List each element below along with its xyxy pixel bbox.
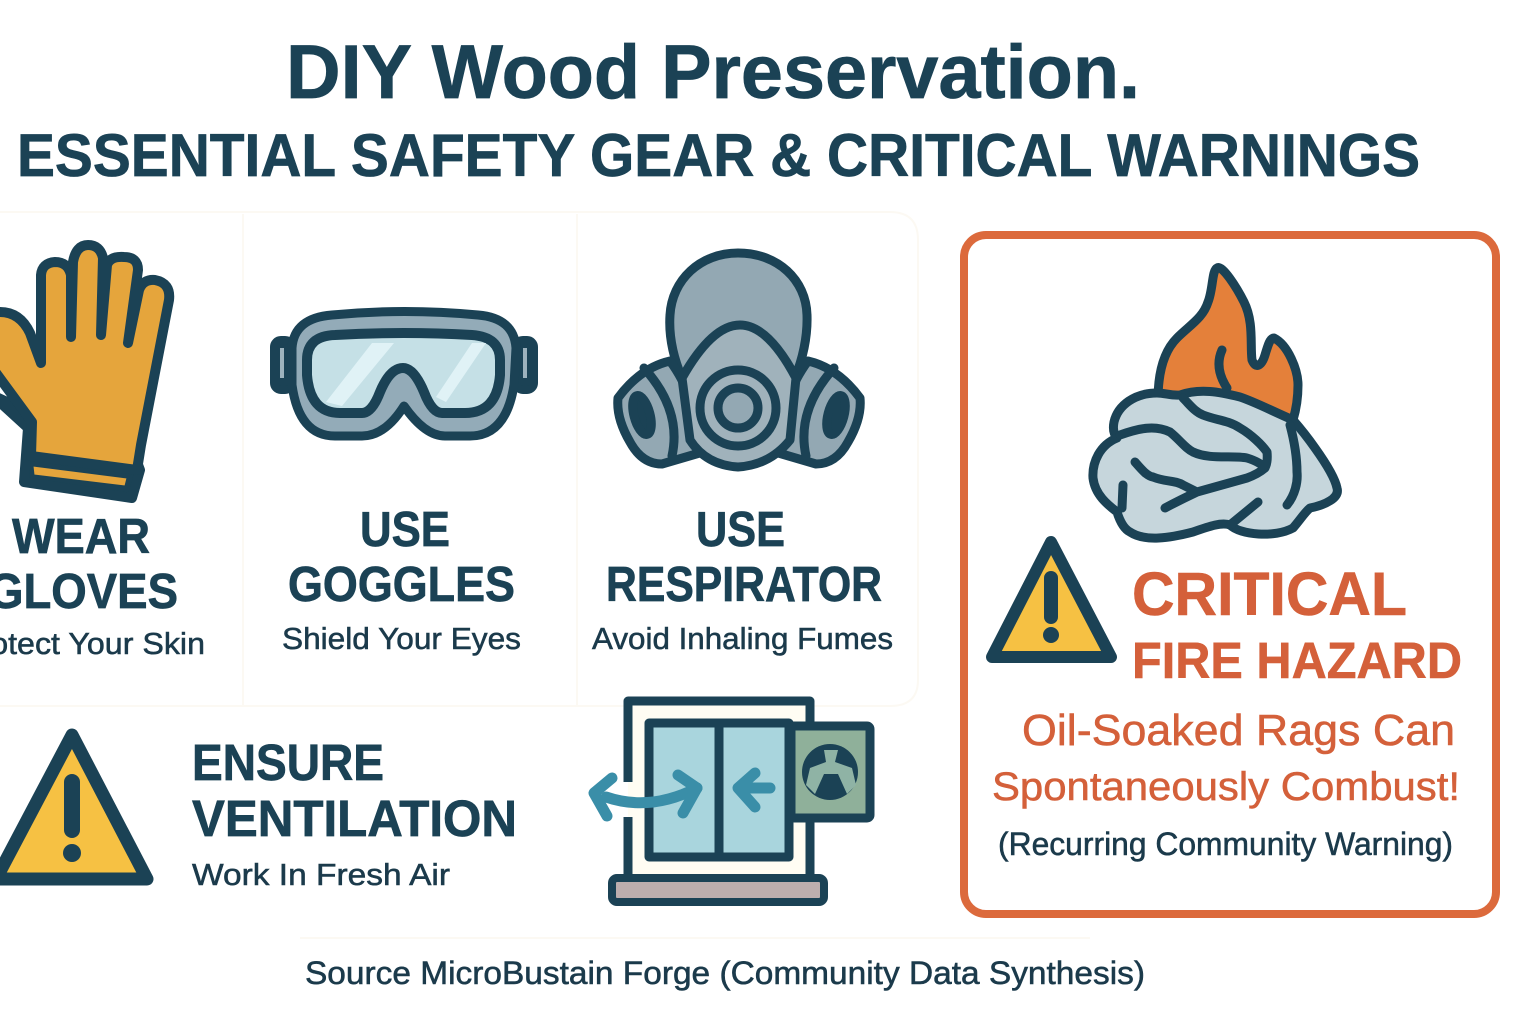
heading: ensure ventilation: VENTILATION xyxy=(192,790,517,847)
heading: use respirator: RESPIRATOR xyxy=(606,558,882,612)
heading: use goggles: GOGGLES xyxy=(288,558,515,612)
heading: use goggles xyxy=(288,503,515,612)
subtitle: ESSENTIAL SAFETY GEAR & CRITICAL WARNINGS xyxy=(17,122,1420,189)
panel: ventilation xyxy=(0,701,870,902)
heading: ensure ventilation: ENSURE xyxy=(192,734,384,791)
title: DIY Wood Preservation. xyxy=(286,30,1140,115)
icon: goggles xyxy=(274,312,534,436)
warning text xyxy=(992,706,1460,809)
heading: fire hazard: FIRE HAZARD xyxy=(1132,632,1462,689)
heading: use respirator xyxy=(606,503,882,612)
heading: critical: CRITICAL xyxy=(1132,560,1407,628)
note: community warning: (Recurring Community Warning) xyxy=(998,826,1453,862)
panel: respirator xyxy=(592,253,893,656)
panel: critical fire hazard xyxy=(964,235,1496,914)
caption: goggles: Shield Your Eyes xyxy=(282,621,521,656)
caption: respirator: Avoid Inhaling Fumes xyxy=(592,621,893,656)
icon: ventilation warning triangle xyxy=(0,735,147,879)
heading: use goggles: USE xyxy=(360,503,450,557)
faint gear panel outline xyxy=(0,212,918,706)
heading: wear gloves xyxy=(0,510,178,619)
heading: wear gloves: WEAR xyxy=(12,510,150,564)
caption: ventilation: Work In Fresh Air xyxy=(192,857,450,892)
icon: warning triangle xyxy=(992,542,1111,657)
heading: use respirator: USE xyxy=(696,503,785,557)
icon: open window with fan xyxy=(594,701,870,902)
icon: respirator xyxy=(618,253,860,467)
warning text: Spontaneously Combust! xyxy=(992,765,1460,809)
icon: glove xyxy=(0,245,169,498)
panel: goggles xyxy=(274,312,534,656)
source line: Source MicroBustain Forge (Community Data Synthesis) xyxy=(305,955,1145,991)
warning text: Oil-Soaked Rags Can xyxy=(1022,706,1455,755)
heading: ensure ventilation xyxy=(192,734,517,847)
icon: burning oily rags xyxy=(1093,268,1337,538)
panel: gloves xyxy=(0,245,205,661)
